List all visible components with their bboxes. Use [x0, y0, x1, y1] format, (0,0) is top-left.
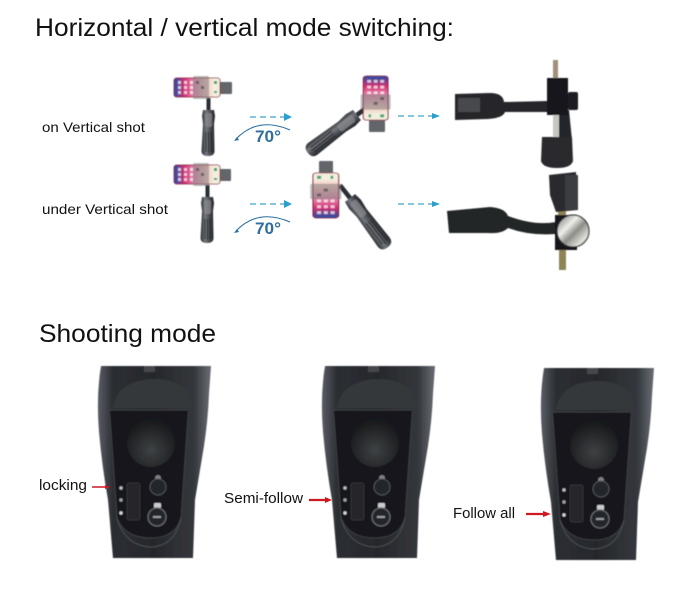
side view: gimbal top [455, 60, 578, 168]
callout: locking: locking [39, 478, 87, 494]
gimbal: upright, top row [174, 76, 232, 156]
arrow: rotation arc with 70 degrees, bottom [234, 217, 290, 238]
arrow: rotation arc with 70 degrees, top: 70° [255, 127, 281, 146]
gimbal: tilted, bottom row [310, 161, 394, 252]
arrow: bottom row dashed, first [250, 200, 292, 208]
arrow: bottom row dashed, second [398, 201, 440, 207]
heading: shooting mode: Shooting mode [39, 320, 216, 348]
arrow: top row dashed, second [398, 113, 440, 119]
callout: locking [39, 478, 110, 494]
title: mode switching: Horizontal / vertical mode switching: [35, 14, 454, 42]
gimbal control panel: locking [98, 366, 211, 558]
arrow: rotation arc with 70 degrees, bottom: 70° [255, 219, 281, 238]
gimbal control panel: follow all [541, 368, 654, 560]
arrow: rotation arc with 70 degrees, top [234, 125, 290, 146]
arrow: top row dashed, first [250, 113, 292, 121]
side view: gimbal bottom [447, 172, 589, 270]
gimbal: upright, bottom row [174, 163, 231, 243]
label: on Vertical shot: on Vertical shot [42, 119, 145, 135]
callout: follow all: Follow all [453, 506, 515, 522]
gimbal: tilted, top row [303, 76, 391, 159]
callout: semi-follow: Semi-follow [224, 491, 304, 507]
callout: follow all [453, 506, 551, 522]
gimbal control panel: semi-follow [322, 366, 435, 558]
callout: semi-follow [224, 491, 332, 507]
label: under Vertical shot: under Vertical shot [42, 201, 168, 217]
